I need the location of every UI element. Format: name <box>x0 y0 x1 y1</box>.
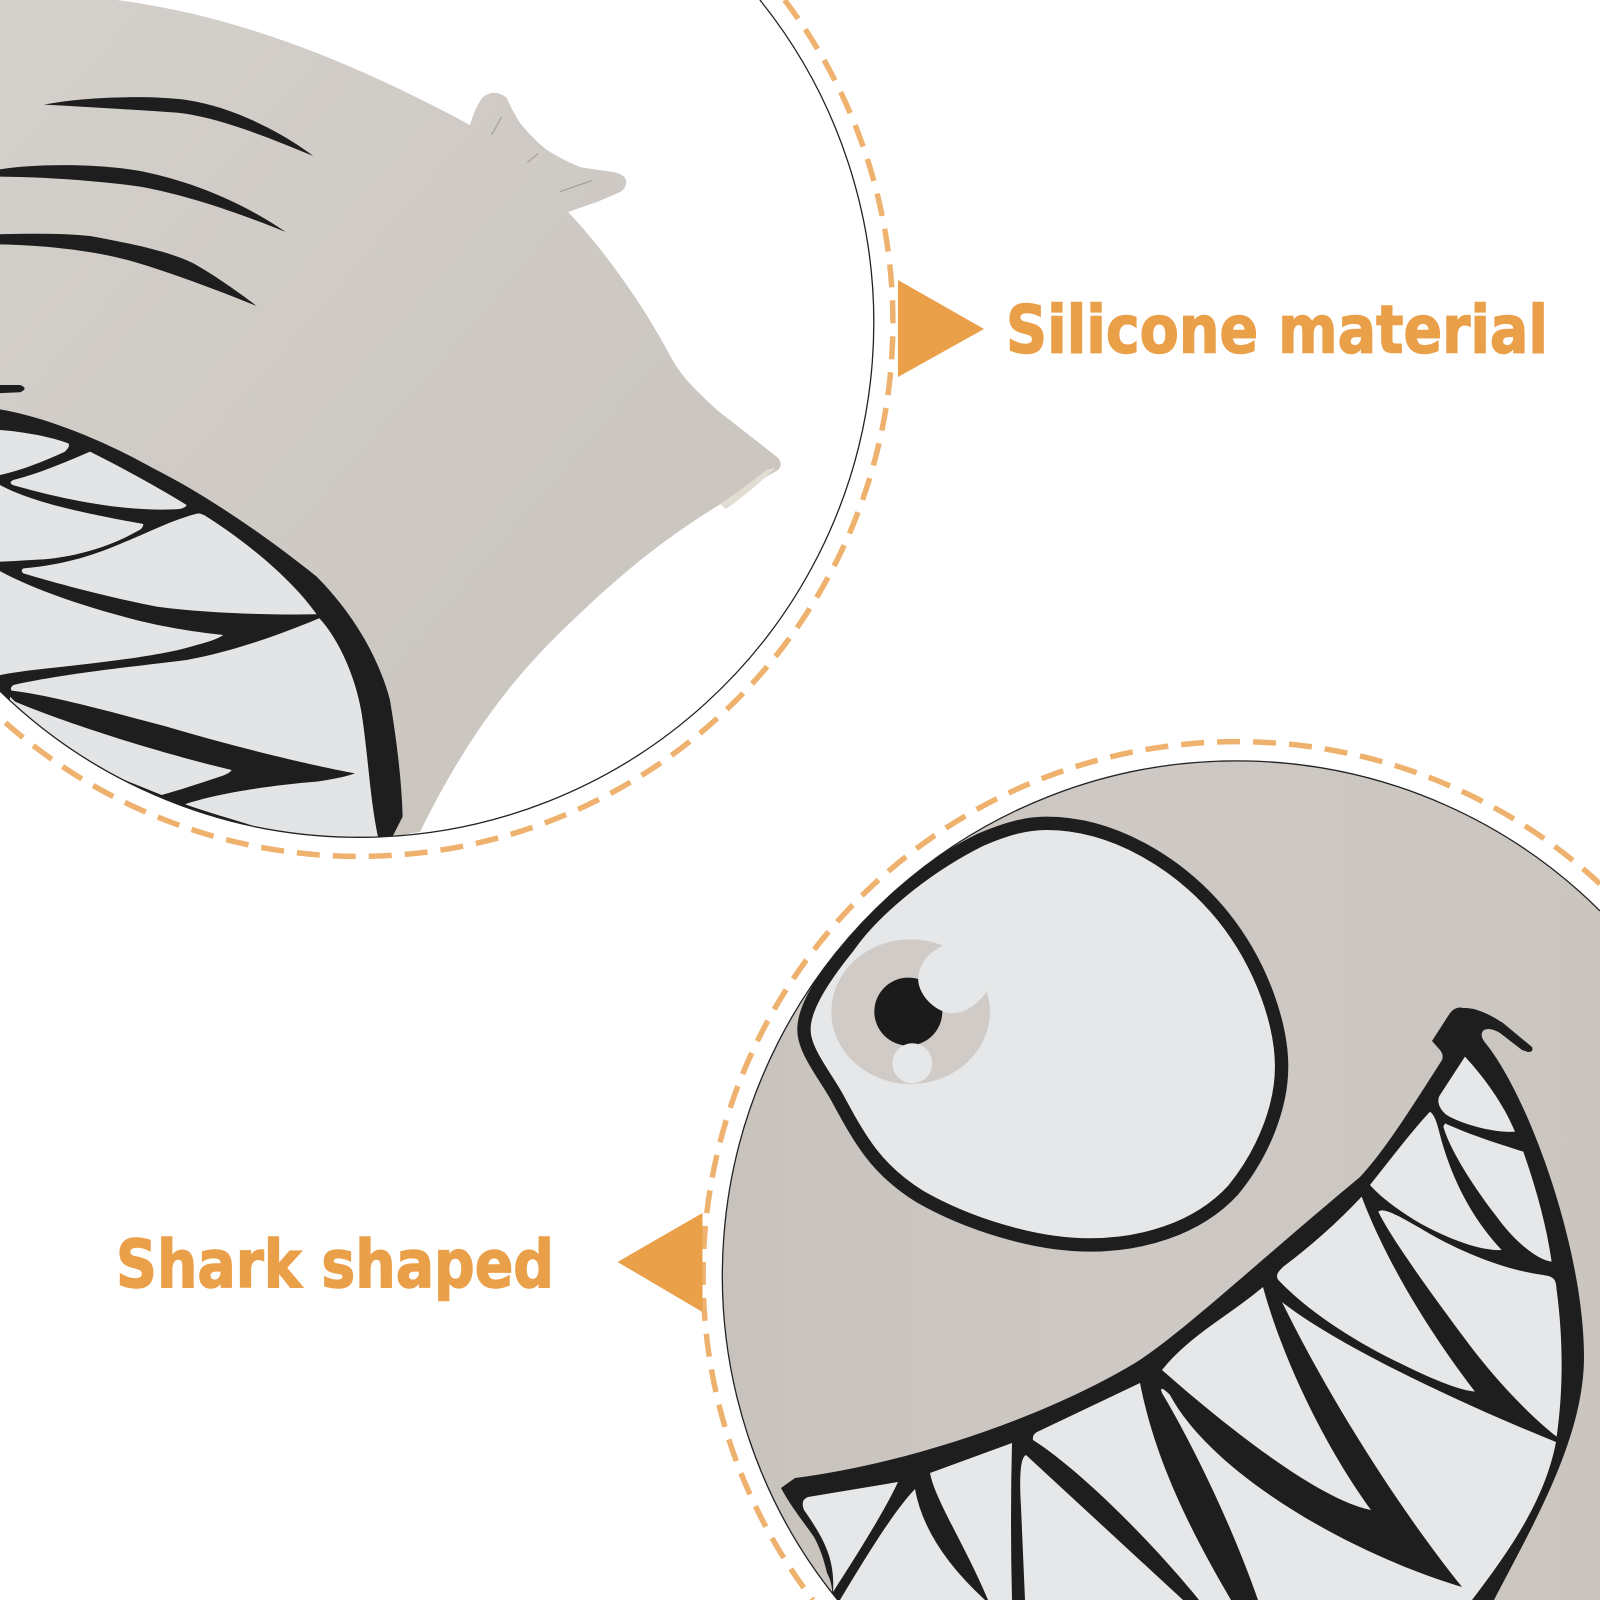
arrow: points to shark shaped panel <box>618 1213 702 1312</box>
arrow: points to silicone material panel <box>898 280 984 377</box>
panel: silicone material close-up circle <box>0 0 874 900</box>
teeth lower row <box>803 1287 1556 1600</box>
iris <box>831 939 990 1084</box>
fin stitch marks <box>492 117 592 192</box>
shark mouth outline <box>781 1008 1584 1600</box>
dashed ring: shark shaped <box>703 742 1600 1600</box>
rolled inner edge <box>720 468 776 509</box>
eye highlight bite <box>918 946 987 1014</box>
shark eye <box>804 823 1282 1245</box>
gill lines <box>0 97 313 393</box>
thin circle outline <box>0 0 874 837</box>
small highlight <box>892 1043 932 1083</box>
cap face <box>700 740 1600 1600</box>
panel: shark shaped close-up circle <box>700 740 1600 1600</box>
mouth with teeth <box>0 408 403 880</box>
thin circle outline <box>722 761 1600 1600</box>
pupil <box>874 978 942 1046</box>
teeth upper right <box>1277 1057 1562 1437</box>
heading: shark shaped: Shark shaped <box>116 1226 554 1303</box>
dashed ring: silicone material <box>0 0 893 856</box>
cap back with fin <box>0 0 781 900</box>
